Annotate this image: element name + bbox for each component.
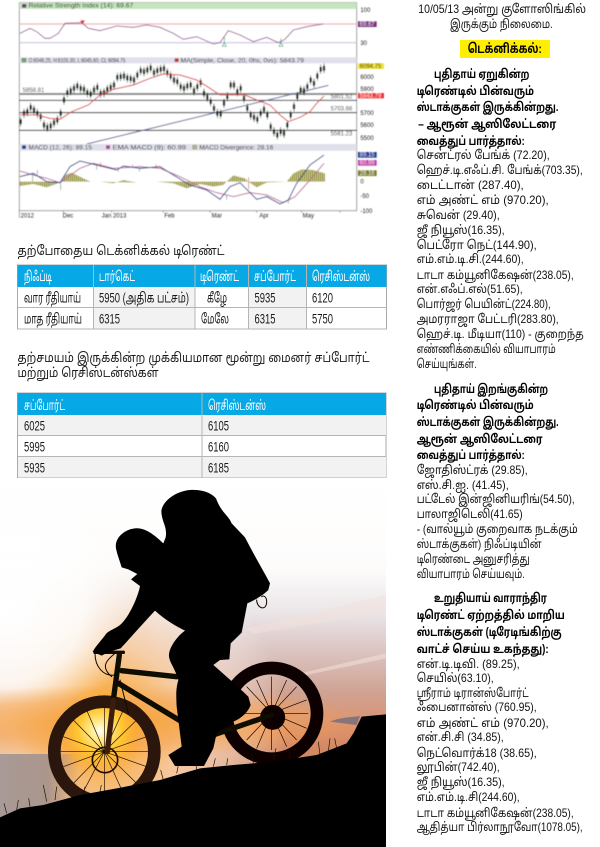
text: uptrend stock list: பெட்ரோ நெட்(144.90), (417, 238, 537, 253)
text: new uptrend heading: புதிதாய் ஏறுகின்ற (434, 67, 530, 83)
text: weekly uptrend stock list: ஃபைனான்ஸ் (760.95), (417, 700, 537, 714)
table header: டிரெண்ட் (200, 269, 239, 285)
heading: technical badge (460, 40, 550, 58)
MACD panel: MACD Divergence: 28.16 (199, 145, 274, 151)
text: new uptrend heading: ஸ்டாக்குகள் இருக்கின்றது. (417, 100, 558, 116)
table rows: 5950 (அதிக பட்சம்) (99, 290, 189, 306)
text: weekly uptrend stock list: எம் அண்ட் எம் (970.20), (417, 716, 549, 730)
date axis: Feb (164, 214, 175, 220)
RSI panel: Relative Strength Index (14): 69.67 (29, 4, 134, 10)
date axis: May (303, 214, 314, 220)
table rows: 5750 (312, 312, 333, 326)
date axis: Apr (259, 214, 269, 220)
text: downtrend stock list: ஸ்டாக்குகள்) நிஃப்டியின் (417, 537, 542, 552)
text: closing status header (418, 2, 586, 32)
text: weekly uptrend heading: டிரெண்ட் ஏற்றத்தில் மாறிய (417, 608, 565, 623)
text: weekly uptrend stock list: என்.டி.டிவி. (89.25), (417, 657, 520, 672)
text: uptrend stock list: எம் அண்ட் எம் (970.20), (417, 193, 549, 207)
price panel: 5801.52 (331, 95, 353, 101)
table: support and resistance (18, 393, 386, 478)
table header: சப்போர்ட் (24, 398, 65, 413)
table rows: 6185 (208, 460, 229, 476)
text: weekly uptrend stock list: ஜீ நியூஸ்(16.35), (417, 775, 505, 790)
MACD panel: -50 (360, 194, 370, 200)
RSI panel: 69.67 (360, 22, 375, 28)
text: new uptrend heading: டிரெண்டில் பின்வரும் (417, 84, 534, 100)
table header: ரெசிஸ்டன்ஸ் (312, 269, 370, 284)
price panel: 5858.81 (23, 88, 45, 94)
table rows: 6120 (312, 290, 333, 306)
text: weekly uptrend stock list: டாடா கம்யூனிகேஷன்(238.05), (417, 806, 574, 821)
text: downtrend stock list: பாலாஜிடெலி(41.65) (417, 507, 523, 522)
table header: டார்கெட் (99, 269, 135, 284)
text: downtrend stock list (417, 463, 578, 581)
MACD panel: 60.99 (360, 161, 375, 167)
date axis: 2012 (21, 214, 35, 220)
text: new downtrend heading (417, 382, 559, 464)
RSI panel: 30 (360, 41, 368, 47)
table rows: 5935 (24, 460, 45, 476)
panel: stock chart (19, 3, 384, 220)
text: weekly uptrend heading (417, 591, 565, 658)
price panel: 5600 (360, 123, 374, 129)
text: uptrend stock list: எம்.எம்.டி.சி.(244.60), (417, 252, 524, 267)
price panel: 5703.66 (331, 107, 353, 113)
candlesticks (21, 63, 324, 140)
text: downtrend stock list: டிரெண்டை அனுசரித்து (417, 552, 530, 567)
table header: நிஃப்டி (24, 269, 52, 286)
MACD panel: 89.15 (360, 153, 375, 159)
text: new uptrend heading (417, 67, 558, 150)
text: new downtrend heading: ஆரூன் ஆஸிலேட்டரை (417, 432, 543, 448)
text: downtrend stock list: ஜோதிஸ்ட்ரக் (29.85), (417, 463, 528, 478)
text: uptrend stock list: செய்யுங்கள். (417, 357, 477, 372)
text: uptrend stock list: டாடா கம்யூனிகேஷன்(238.05), (417, 268, 574, 283)
text: new uptrend heading: – ஆரூன் ஆஸிலேட்டரை (418, 117, 557, 133)
heading: current technical trend: தற்போதைய டெக்னிக்கல் டிரெண்ட் (18, 243, 224, 259)
table rows: 5995 (24, 440, 45, 454)
text: downtrend stock list: எஸ்.சி.ஐ. (41.45), (417, 478, 509, 493)
heading: three minor support and resistance: மற்றும் ரெசிஸ்டன்ஸ்கள் (18, 365, 159, 381)
text: downtrend stock list: பட்டேல் இன்ஜினியரிங்(54.50), (417, 492, 575, 507)
MACD panel: EMA MACD (9): 60.99 (113, 145, 187, 151)
text: new uptrend heading: வைத்துப் பார்த்தால்: (417, 134, 525, 150)
table header: சப்போர்ட் (254, 269, 296, 284)
text: weekly uptrend heading: வாட்ச் செய்ய உகந்தது): (417, 642, 549, 658)
text: weekly uptrend stock list: ஸ்ரீராம் டிரான்ஸ்போர்ட் (417, 686, 529, 701)
date axis: Mar (212, 214, 222, 220)
text: uptrend stock list: பொர்ஜர் பெயின்ட்(224.80), (417, 297, 551, 312)
table rows (24, 290, 333, 328)
hillside (0, 714, 386, 847)
table header: ரெசிஸ்டன்ஸ் (208, 398, 266, 413)
price panel: O:6046.25, H:6105.30, L:6045.60, CL:6094.75 (29, 58, 126, 64)
table rows: 6315 (254, 312, 276, 326)
text: weekly uptrend stock list: என்.சி.சி (34.85), (417, 730, 504, 744)
table rows: 6160 (208, 440, 229, 454)
price panel: 5500 (360, 136, 374, 142)
table rows: 6315 (99, 312, 120, 326)
text: weekly uptrend heading: ஸ்டாக்குகள் (டிரேடிங்கிற்கு (417, 625, 562, 640)
date axis: Jan 2013 (102, 214, 127, 220)
table rows: 6105 (208, 418, 229, 434)
price panel: 5700 (360, 111, 374, 117)
text: uptrend stock list: அமரராஜா பேட்டரி(283.80), (417, 312, 559, 327)
text: uptrend stock list (417, 148, 584, 372)
text: uptrend stock list: எண்ணிக்கையில் வியாபாரம் (417, 342, 556, 356)
rear wheel (226, 668, 317, 759)
table rows (24, 418, 229, 476)
text: uptrend stock list: ஜீ நியூஸ்(16.35), (417, 223, 505, 238)
text: uptrend stock list: என்.எஃப்.எல்(51.65), (417, 282, 523, 296)
photo: cyclist silhouette at sunset (0, 480, 386, 847)
text: closing status header: இருக்கும் நிலைமை. (450, 17, 553, 32)
table rows: வார ரீதியாய் (24, 290, 81, 306)
heading: three minor support and resistance: தற்சமயம் இருக்கின்ற முக்கியமான மூன்று மைனர் சப்போர்ட் (18, 350, 370, 366)
MACD panel: 28.16 (360, 171, 375, 177)
table rows: 5935 (254, 290, 276, 306)
MACD panel: MACD (12, 26): 89.15 (29, 145, 93, 151)
text: weekly uptrend stock list: லூபின்(742.40), (417, 760, 500, 775)
table rows: மேலே (201, 312, 229, 326)
table rows: கீழே (207, 290, 227, 306)
text: new downtrend heading: ஸ்டாக்குகள் இருக்கின்றது. (417, 415, 559, 431)
text: new downtrend heading: டிரெண்டில் பின்வரும் (417, 398, 534, 414)
table header (24, 398, 266, 413)
MACD panel: 0 (360, 179, 364, 185)
RSI panel (19, 3, 377, 47)
text: weekly uptrend stock list: நெட்வொர்க்18 (38.65), (417, 746, 537, 761)
price panel: MA(Simple, Close, 20, 0hs, 0vs): 5843.79 (181, 58, 305, 64)
text: uptrend stock list: டைட்டான் (287.40), (417, 178, 524, 192)
MACD panel (19, 144, 377, 215)
table rows: மாத ரீதியாய் (24, 312, 82, 328)
price panel (19, 57, 384, 144)
price panel: 6094.75 (360, 64, 382, 70)
MACD panel: -100 (360, 209, 373, 215)
text: new downtrend heading: புதிதாய் இறங்குகின்ற (434, 382, 548, 398)
table: technical trend (18, 265, 386, 329)
table header (24, 269, 370, 286)
date axis: Dec (63, 214, 73, 220)
heading: technical badge: டெக்னிக்கல்: (468, 41, 542, 56)
text: uptrend stock list: சென்ட்ரல் பேங்க் (72.20), (417, 148, 550, 162)
text: uptrend stock list: சுவென் (29.40), (417, 208, 500, 222)
price panel: 5843.79 (360, 94, 382, 100)
text: weekly uptrend stock list: எம்.எம்.டி.சி(244.60), (417, 790, 520, 805)
RSI panel: 100 (360, 8, 371, 14)
price panel: 6000 (360, 75, 374, 81)
grass (4, 738, 337, 813)
text: new downtrend heading: வைத்துப் பார்த்தால்: (417, 448, 525, 464)
bicycle frame (95, 596, 272, 752)
text: weekly uptrend stock list (417, 657, 583, 835)
table rows: 6025 (24, 418, 45, 434)
date axis (19, 211, 340, 220)
heading: three minor support and resistance (18, 350, 370, 381)
front wheel (54, 702, 154, 802)
price panel: 5900 (360, 87, 374, 93)
price panel: 5561.23 (331, 132, 353, 138)
text: downtrend stock list: வியாபாரம் செய்யவும். (417, 567, 525, 581)
text: weekly uptrend stock list: செயில்(63.10), (417, 671, 494, 685)
text: weekly uptrend heading: உறுதியாய் வாராந்திர (434, 591, 548, 607)
rider silhouette (93, 490, 270, 766)
